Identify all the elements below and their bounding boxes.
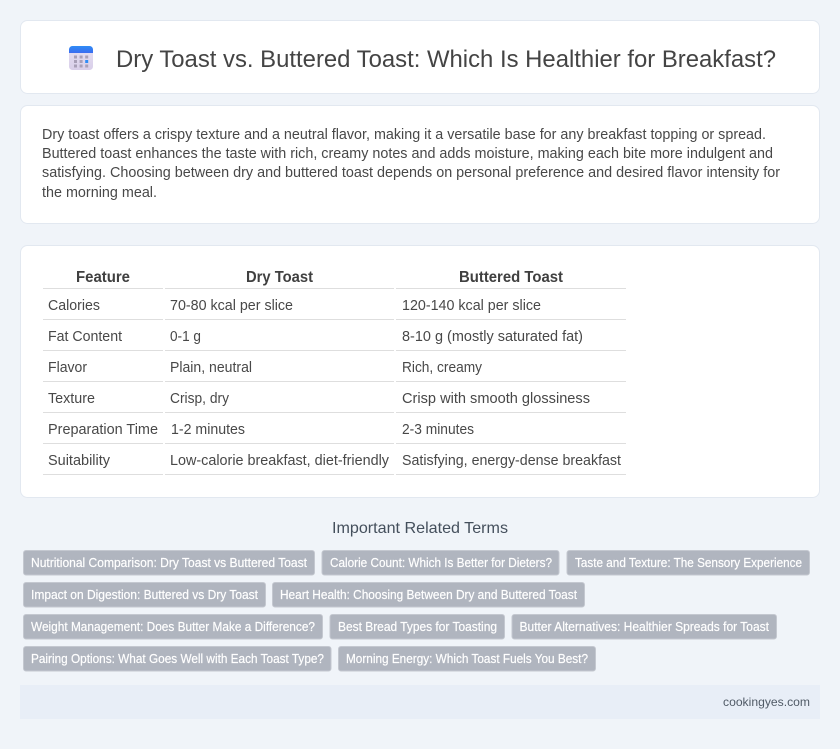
row: calories: 70-80 kcal per slice [170, 298, 293, 314]
table header row: Dry Toast [246, 269, 313, 286]
tag: Taste and Texture: The Sensory Experience [575, 556, 802, 570]
tag [567, 550, 810, 575]
icon: calendar [69, 46, 93, 70]
row: preparation time: 2-3 minutes [402, 422, 474, 438]
row: texture: Texture [48, 391, 95, 407]
row: calories: 120-140 kcal per slice [402, 298, 541, 314]
row: calories [48, 298, 541, 314]
row: suitability: Satisfying, energy-dense breakfast [402, 453, 621, 469]
row: flavor [48, 360, 483, 376]
row: fat content: Fat Content [48, 329, 122, 345]
panel: introduction [20, 106, 820, 224]
row: texture: Crisp, dry [170, 391, 230, 407]
tag [330, 614, 504, 639]
row: fat content: 8-10 g (mostly saturated fat) [402, 329, 583, 345]
table header row [76, 269, 563, 286]
intro paragraph: Buttered toast enhances the taste with rich, creamy notes and adds moisture, making each bite more indulgent and [42, 146, 773, 162]
tag [24, 582, 266, 607]
row: flavor: Plain, neutral [170, 360, 252, 376]
row: suitability: Suitability [48, 453, 111, 469]
related term tags [24, 550, 810, 671]
intro paragraph [42, 127, 780, 201]
footer source text: cookingyes.com [723, 695, 810, 709]
tag: Impact on Digestion: Buttered vs Dry Toast [31, 588, 258, 602]
row: preparation time: 1-2 minutes [171, 422, 245, 438]
footer [20, 685, 820, 719]
tag: Morning Energy: Which Toast Fuels You Best? [346, 652, 588, 666]
row: texture: Crisp with smooth glossiness [402, 391, 590, 407]
row: texture [48, 391, 590, 407]
heading: important related terms: Important Related Terms [332, 520, 508, 537]
title: Dry Toast vs. Buttered Toast: Which Is Healthier for Breakfast? [116, 46, 776, 73]
tag: Heart Health: Choosing Between Dry and Buttered Toast [280, 588, 577, 602]
row: preparation time [48, 422, 474, 438]
tag: Calorie Count: Which Is Better for Dieters? [330, 556, 552, 570]
tag [512, 614, 776, 639]
tag: Butter Alternatives: Healthier Spreads for Toast [520, 620, 769, 634]
intro paragraph: satisfying. Choosing between dry and buttered toast depends on personal preference and desired flavor intensity for [42, 165, 780, 181]
row: preparation time: Preparation Time [48, 422, 158, 438]
panel: comparison table [20, 246, 820, 498]
tag [24, 614, 322, 639]
table header row: Buttered Toast [459, 269, 563, 286]
tag [338, 646, 596, 671]
tag: Best Bread Types for Toasting [338, 620, 497, 634]
row: calories: Calories [48, 298, 100, 314]
tag [24, 646, 331, 671]
tag: Weight Management: Does Butter Make a Difference? [31, 620, 315, 634]
tag [24, 550, 314, 575]
tag: Nutritional Comparison: Dry Toast vs Buttered Toast [31, 556, 307, 570]
row: flavor: Rich, creamy [402, 360, 483, 376]
intro paragraph: the morning meal. [42, 185, 157, 201]
tag [322, 550, 559, 575]
row: suitability [48, 453, 621, 469]
header panel [20, 20, 820, 94]
intro paragraph: Dry toast offers a crispy texture and a neutral flavor, making it a versatile base for any breakfast topping or spread. [42, 127, 766, 143]
tag: Pairing Options: What Goes Well with Each Toast Type? [31, 652, 324, 666]
row: fat content [48, 329, 583, 345]
table header row: Feature [76, 269, 130, 286]
tag [272, 582, 584, 607]
row: fat content: 0-1 g [170, 329, 201, 345]
row: suitability: Low-calorie breakfast, diet-friendly [170, 453, 390, 469]
row: flavor: Flavor [48, 360, 87, 376]
